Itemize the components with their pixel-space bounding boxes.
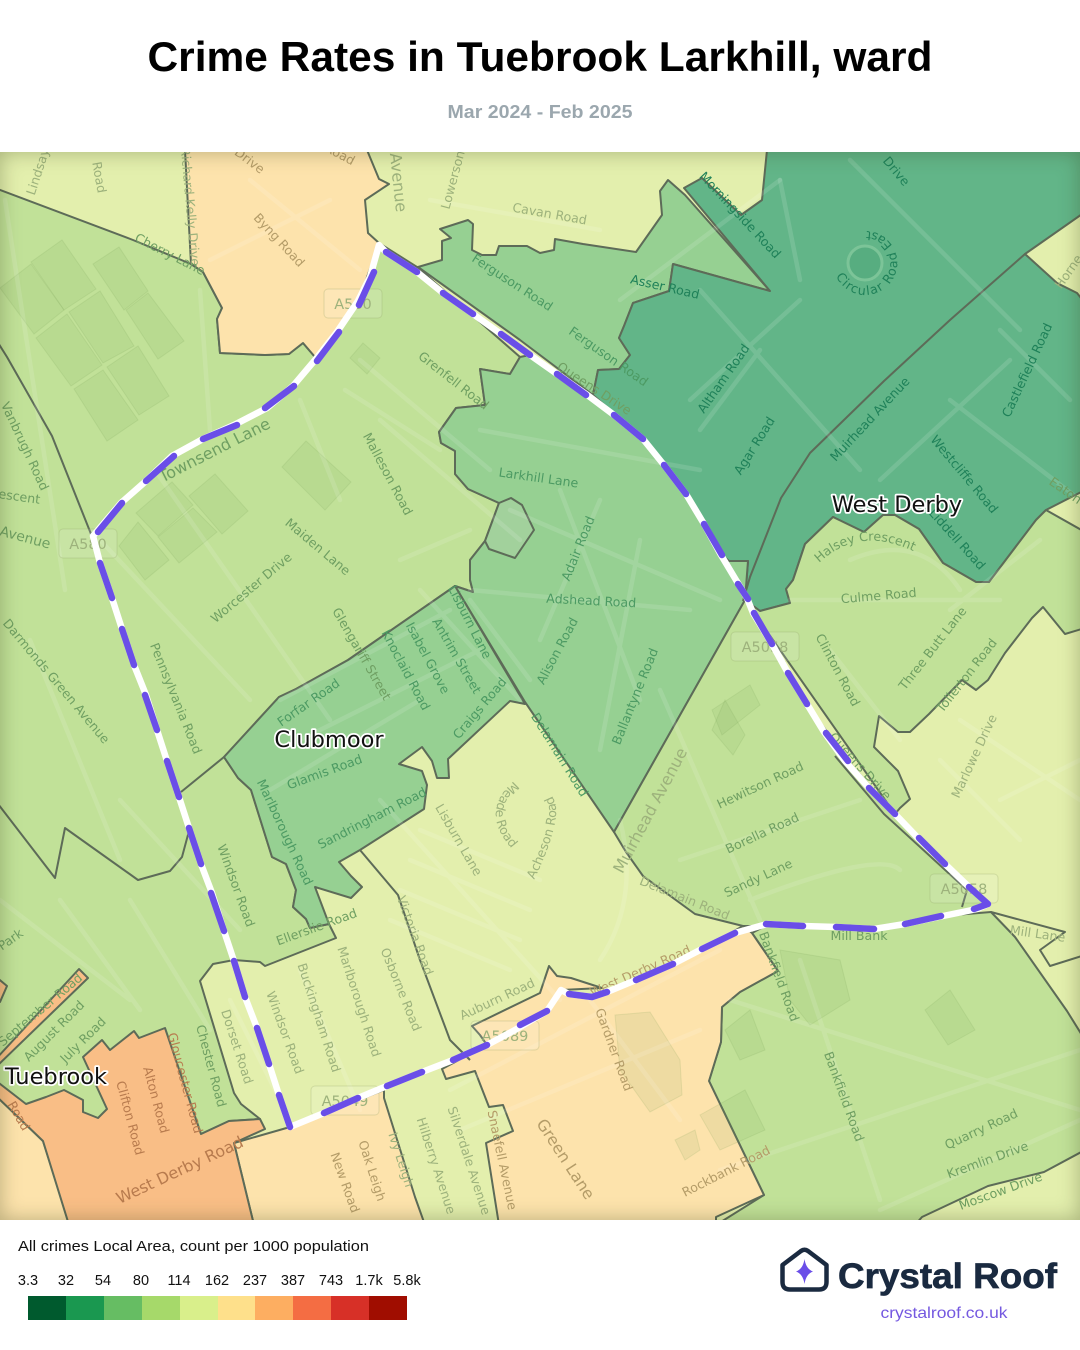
road name labels: Tollerton Road	[932, 635, 1000, 716]
subtitle: date range: Mar 2024 - Feb 2025	[448, 102, 632, 122]
road name labels: Rockbank Road	[679, 1142, 772, 1200]
road name labels: Muirhead Avenue	[827, 374, 913, 464]
region: orange Tuebrook	[0, 1028, 265, 1225]
road name labels: West Derby Road	[587, 942, 693, 1000]
region: medium green Larkhill	[439, 355, 748, 832]
road name labels: Maiden Lane	[282, 515, 354, 578]
road name labels: Grenfell Road	[416, 348, 492, 413]
road name labels: Antrim Street	[429, 615, 485, 696]
region: tan area south-west corner	[0, 1095, 69, 1222]
region: tan area south, New Road	[234, 1090, 425, 1225]
road name labels: Silverdale Avenue	[445, 1105, 494, 1217]
legend scale values: 162	[205, 1273, 229, 1289]
road name labels: Adair Road	[558, 514, 598, 583]
road shields: A5058	[941, 882, 987, 898]
road name labels: Borella Road	[723, 809, 801, 856]
road name labels: Hewitson Road	[714, 758, 806, 812]
road name labels: Queens Drive	[826, 729, 895, 803]
road name labels: Westcliffe Road	[928, 432, 1001, 516]
region: medium green Clubmoor	[224, 586, 525, 928]
road name labels: Kremlin Drive	[945, 1138, 1031, 1181]
road name labels: Marlborough Road	[254, 777, 316, 887]
road name labels: Glengariff Street	[329, 605, 395, 703]
road shields: A5049	[322, 1094, 368, 1110]
road name labels: Road	[89, 160, 110, 194]
region: tan area south, Green Lane	[442, 926, 778, 1225]
road name labels: Alton Road	[140, 1065, 172, 1135]
road name labels: Morningside Road	[696, 169, 784, 261]
road name labels: Dorset Road	[218, 1007, 256, 1086]
road: circle at Circular Road	[848, 246, 882, 280]
road name labels: Delamain Road	[528, 710, 592, 799]
road name labels: Bankfield Road	[821, 1050, 867, 1143]
road name labels: Altham Road	[694, 341, 753, 416]
legend scale values: 5.8k	[393, 1273, 421, 1289]
ward boundary: white casing	[93, 245, 988, 1127]
region: tan wedge by Auburn Road	[472, 966, 602, 1045]
road name labels: Three Butt Lane	[895, 604, 970, 693]
road name labels: Mill Bank	[830, 928, 888, 943]
region: mid-green Culme Road	[745, 510, 1080, 814]
road name labels: Green Lane	[533, 1115, 599, 1203]
road shields: A5089	[482, 1029, 528, 1045]
road name labels: Circular Road East	[838, 231, 898, 296]
region: park within Larkhill	[485, 498, 534, 558]
road name labels: Muirhead Avenue	[609, 745, 691, 876]
road name labels: Liddell Road	[926, 505, 989, 573]
title: Crime Rates in Tuebrook Larkhill, ward	[148, 33, 932, 80]
road name labels: Hilberry Avenue	[414, 1115, 459, 1216]
road name labels: Darmonds Green Avenue	[0, 616, 113, 747]
region: orange strip September Road	[0, 969, 88, 1068]
legend	[18, 1238, 421, 1320]
road name labels: Marlowe Drive	[948, 712, 1000, 800]
road shields: A580	[334, 297, 372, 313]
road name labels: Clifton Road	[113, 1079, 147, 1157]
road name labels: Culme Road	[840, 585, 917, 606]
road name labels: August Road	[20, 997, 87, 1064]
road name labels: Oak Leigh	[355, 1138, 389, 1203]
road name labels: Cherry Lane	[133, 230, 208, 278]
road name labels: Adshead Road	[546, 591, 637, 610]
road name labels: Richard Kelly Drive	[178, 147, 203, 267]
legend scale values: 80	[133, 1273, 149, 1289]
road name labels: Lowerson	[438, 149, 468, 211]
region: dark green West Derby	[593, 150, 1080, 611]
road name labels: Meade Road	[496, 782, 520, 848]
road name labels: Road	[323, 140, 358, 168]
place label: West Derby: West Derby	[832, 492, 962, 518]
road name labels: Sandringham Road	[315, 784, 429, 852]
road name labels: Moscow Drive	[957, 1169, 1044, 1213]
road name labels: Road	[4, 1098, 33, 1133]
region: mid-green Bankfield Road	[709, 912, 1080, 1225]
road name labels: New Road	[327, 1150, 363, 1215]
legend scale values: 237	[243, 1273, 267, 1289]
road name labels: Windsor Road	[214, 842, 258, 929]
road name labels: Drive	[880, 153, 913, 189]
road shields: A580	[69, 537, 107, 553]
road name labels: Quarry Road	[942, 1105, 1020, 1152]
road name labels: Lisburn Lane	[445, 583, 495, 661]
road name labels: Ivy Leigh	[385, 1130, 417, 1189]
region: mid-green Hewitson Road	[614, 600, 988, 929]
road name labels: Glamis Road	[285, 751, 364, 792]
road name labels: Townsend Lane	[155, 414, 273, 487]
legend scale values: 3.3	[18, 1273, 38, 1289]
building footprints	[0, 240, 975, 1160]
road name labels: Clinton Road	[813, 631, 863, 709]
road name labels: Malleson Road	[360, 430, 416, 518]
place label: Tuebrook: Tuebrook	[4, 1064, 107, 1090]
legend scale values: 387	[281, 1273, 305, 1289]
legend scale values: 1.7k	[355, 1273, 383, 1289]
road name labels: July Road	[56, 1014, 109, 1066]
road name labels: Sandy Lane	[722, 855, 795, 900]
region: orange edge	[0, 976, 7, 1002]
road name labels: Avenue	[386, 152, 411, 213]
road name labels: Ferguson Road	[469, 251, 556, 314]
road name labels: Castlefield Road	[999, 321, 1055, 420]
other boundary lines	[0, 254, 1080, 1060]
legend scale values	[18, 1273, 421, 1289]
road name labels	[0, 152, 1080, 1215]
road name labels: Ellerslie Road	[274, 905, 359, 948]
road name labels: Larkhill Lane	[498, 465, 580, 491]
place label: Clubmoor: Clubmoor	[274, 727, 384, 753]
road name labels: Asser Road	[629, 271, 701, 302]
road name labels: Windsor Road	[263, 989, 307, 1076]
road name labels: Alison Road	[533, 615, 581, 687]
road name labels: Lisburn Lane	[432, 801, 486, 879]
logo wordmark: Crystal Roof	[838, 1257, 1057, 1296]
road shields	[59, 289, 998, 1115]
road name labels: Agar Road	[731, 414, 778, 477]
region: medium green Ferguson Road	[418, 180, 770, 395]
legend scale values: 32	[58, 1273, 74, 1289]
legend scale values: 54	[95, 1273, 111, 1289]
road name labels: Buckingham Road	[295, 961, 344, 1074]
logo: Crystal Roof	[782, 1250, 1057, 1322]
road name labels: Craigs Road	[450, 674, 510, 742]
road name labels: Forfar Road	[274, 675, 342, 729]
road name labels: Ballantyne Road	[609, 646, 661, 747]
legend colour bar	[28, 1296, 407, 1320]
logo url: crystalroof.co.uk	[880, 1305, 1009, 1322]
legend scale values: 743	[319, 1273, 343, 1289]
region: tan area north, Byng Road	[185, 150, 389, 357]
ward boundary: purple dashes	[98, 252, 988, 1127]
road name labels: Worcester Drive	[208, 549, 295, 626]
road name labels: Marlborough Road	[334, 945, 384, 1059]
road name labels: Osborne Road	[378, 945, 425, 1033]
road name labels: Pennsylvania Road	[147, 641, 205, 756]
road name labels: Acheson Road	[527, 796, 556, 880]
road name labels: Victoria Road	[394, 894, 437, 977]
road name labels: Queens Drive	[555, 359, 635, 418]
road name labels: Lindsay	[23, 146, 52, 197]
legend title: All crimes Local Area, count per 1000 population	[18, 1238, 369, 1255]
road name labels: Byng Road	[251, 210, 308, 270]
road name labels: Chester Road	[193, 1023, 230, 1109]
road name labels: Mill Lane	[1009, 922, 1067, 945]
road name labels: Delamain Road	[637, 873, 732, 923]
road name labels: Snaefell Avenue	[485, 1109, 520, 1211]
road name labels: Halsey Crescent	[814, 532, 916, 562]
icon: house with star	[782, 1250, 826, 1290]
road name labels: Gloucester Road	[165, 1031, 206, 1135]
road name labels: West Derby Road	[113, 1132, 246, 1208]
road name labels: Ferguson Road	[566, 323, 651, 389]
road name labels: Cavan Road	[511, 200, 588, 227]
road name labels: Knoclaid Road	[378, 627, 434, 713]
region: large mid-green area west and ward interior	[0, 188, 520, 1132]
minor roads	[0, 160, 1080, 1210]
road name labels: Isabel Grove	[403, 620, 453, 696]
road name labels: Auburn Road	[457, 975, 537, 1023]
legend scale values: 114	[167, 1273, 191, 1289]
road name labels: Drive	[232, 144, 268, 177]
road shields: A5058	[742, 640, 788, 656]
road name labels: Gardner Road	[592, 1006, 636, 1093]
road name labels: Bankfield Road	[756, 930, 802, 1023]
